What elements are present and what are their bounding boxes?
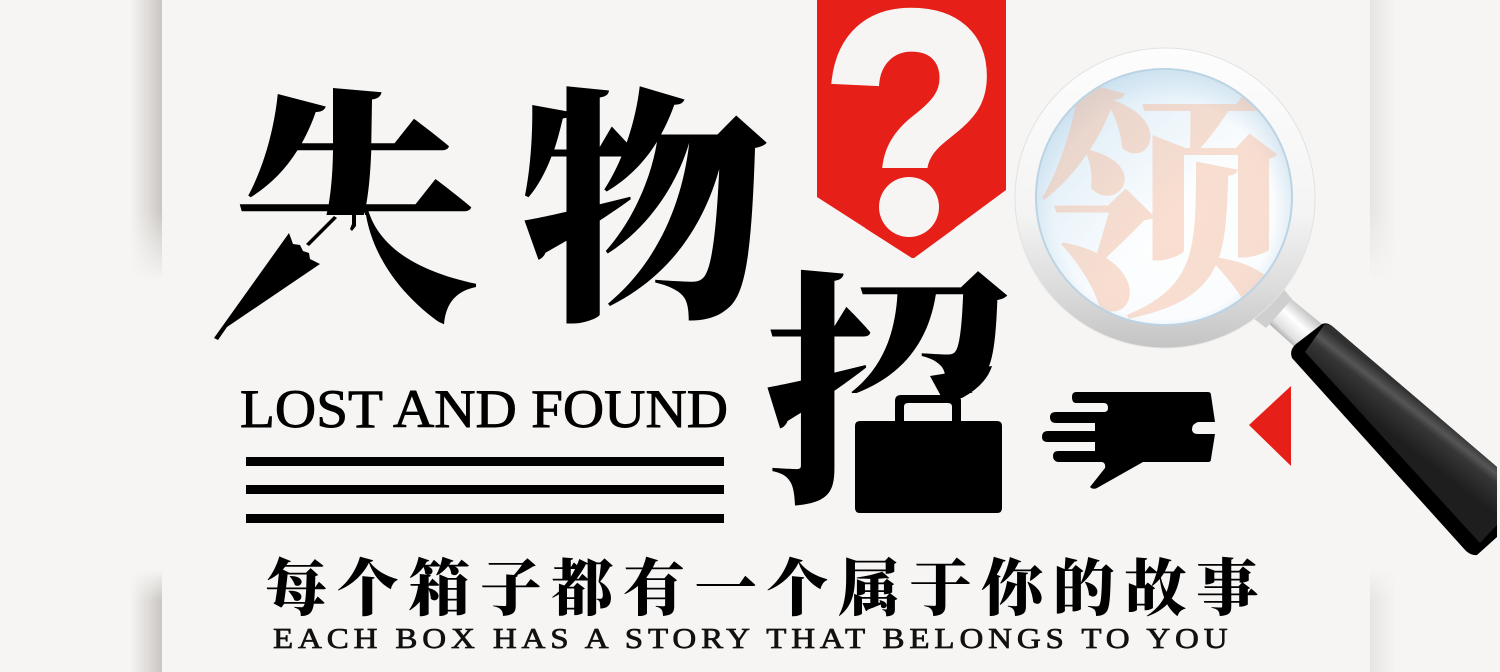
handle neck — [1267, 298, 1322, 349]
lens character 领: 领 — [1038, 74, 1304, 351]
icon: red triangle — [1249, 386, 1291, 466]
rim — [1015, 48, 1315, 348]
lens — [1036, 69, 1292, 325]
three black bars — [246, 457, 724, 523]
title: 失 with umbrella: 失 — [229, 78, 479, 355]
title: 招 with briefcase: 招 — [764, 261, 1012, 536]
icon: umbrella — [214, 214, 356, 340]
heading: LOST AND FOUND: LOST AND FOUND — [240, 379, 728, 439]
handle grip — [1291, 323, 1497, 555]
icon: briefcase — [855, 395, 1002, 513]
icon: pointing hand — [1042, 392, 1215, 489]
title: 物: 物 — [519, 78, 769, 355]
subtitle: chinese: 每个箱子都有一个属于你的故事 — [265, 555, 1258, 624]
icon: magnifying glass — [1015, 48, 1497, 555]
subtitle: english: EACH BOX HAS A STORY THAT BELONGS TO YOU — [273, 623, 1228, 654]
